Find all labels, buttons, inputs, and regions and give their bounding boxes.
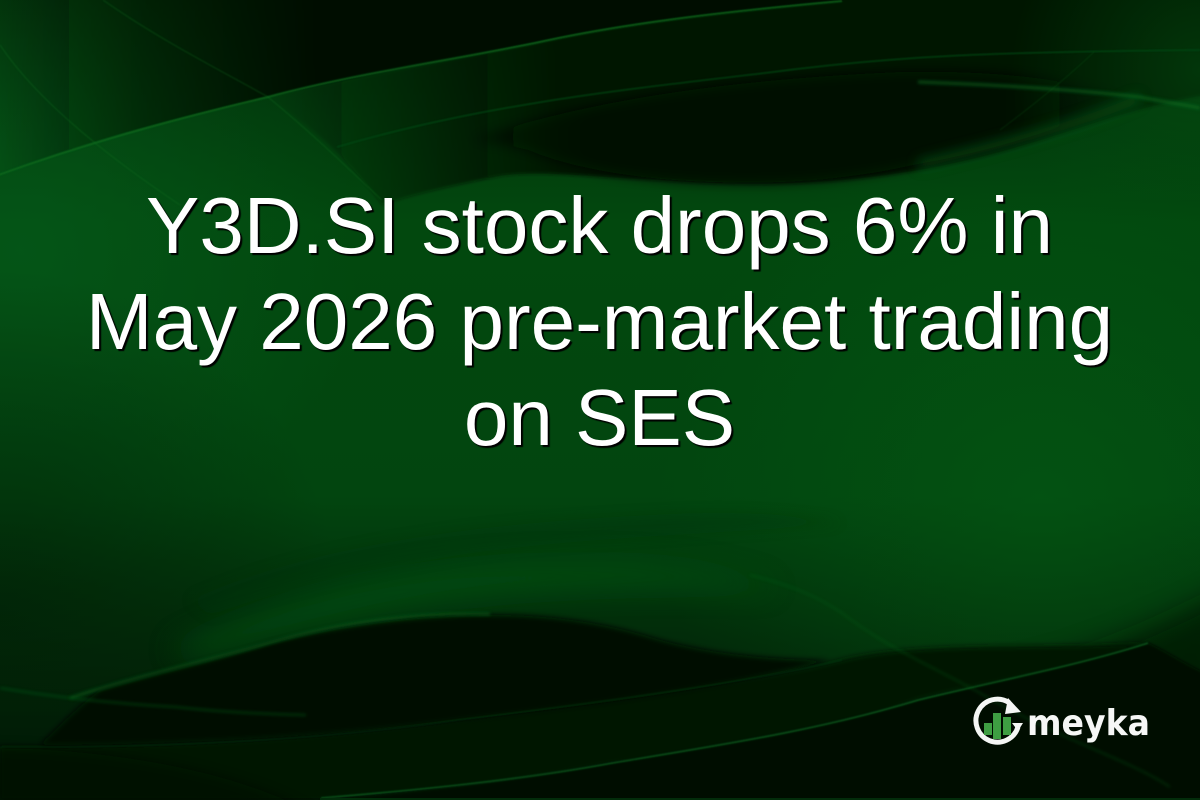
title: on SES [464, 373, 735, 462]
top dark band [268, 0, 1200, 205]
bottom band below hill [0, 643, 1148, 800]
top bright streaks [0, 0, 1200, 205]
top left dark area above the bright curve [0, 0, 860, 175]
bottom darkest area [321, 643, 1200, 800]
top dark eye [470, 72, 1130, 183]
title [86, 181, 1113, 462]
right lower shade [970, 590, 1200, 800]
title: May 2026 pre-market trading [86, 277, 1113, 366]
icon: circular arrow with bars [976, 698, 1023, 742]
lower soft bright band [170, 562, 780, 660]
logo: meyka [973, 696, 1150, 745]
top right glow [980, 0, 1200, 200]
lower soft dark band [191, 513, 842, 615]
bottom dark hill [40, 615, 830, 745]
bottom bright streaks [0, 575, 1200, 799]
title: Y3D.SI stock drops 6% in [146, 181, 1053, 270]
